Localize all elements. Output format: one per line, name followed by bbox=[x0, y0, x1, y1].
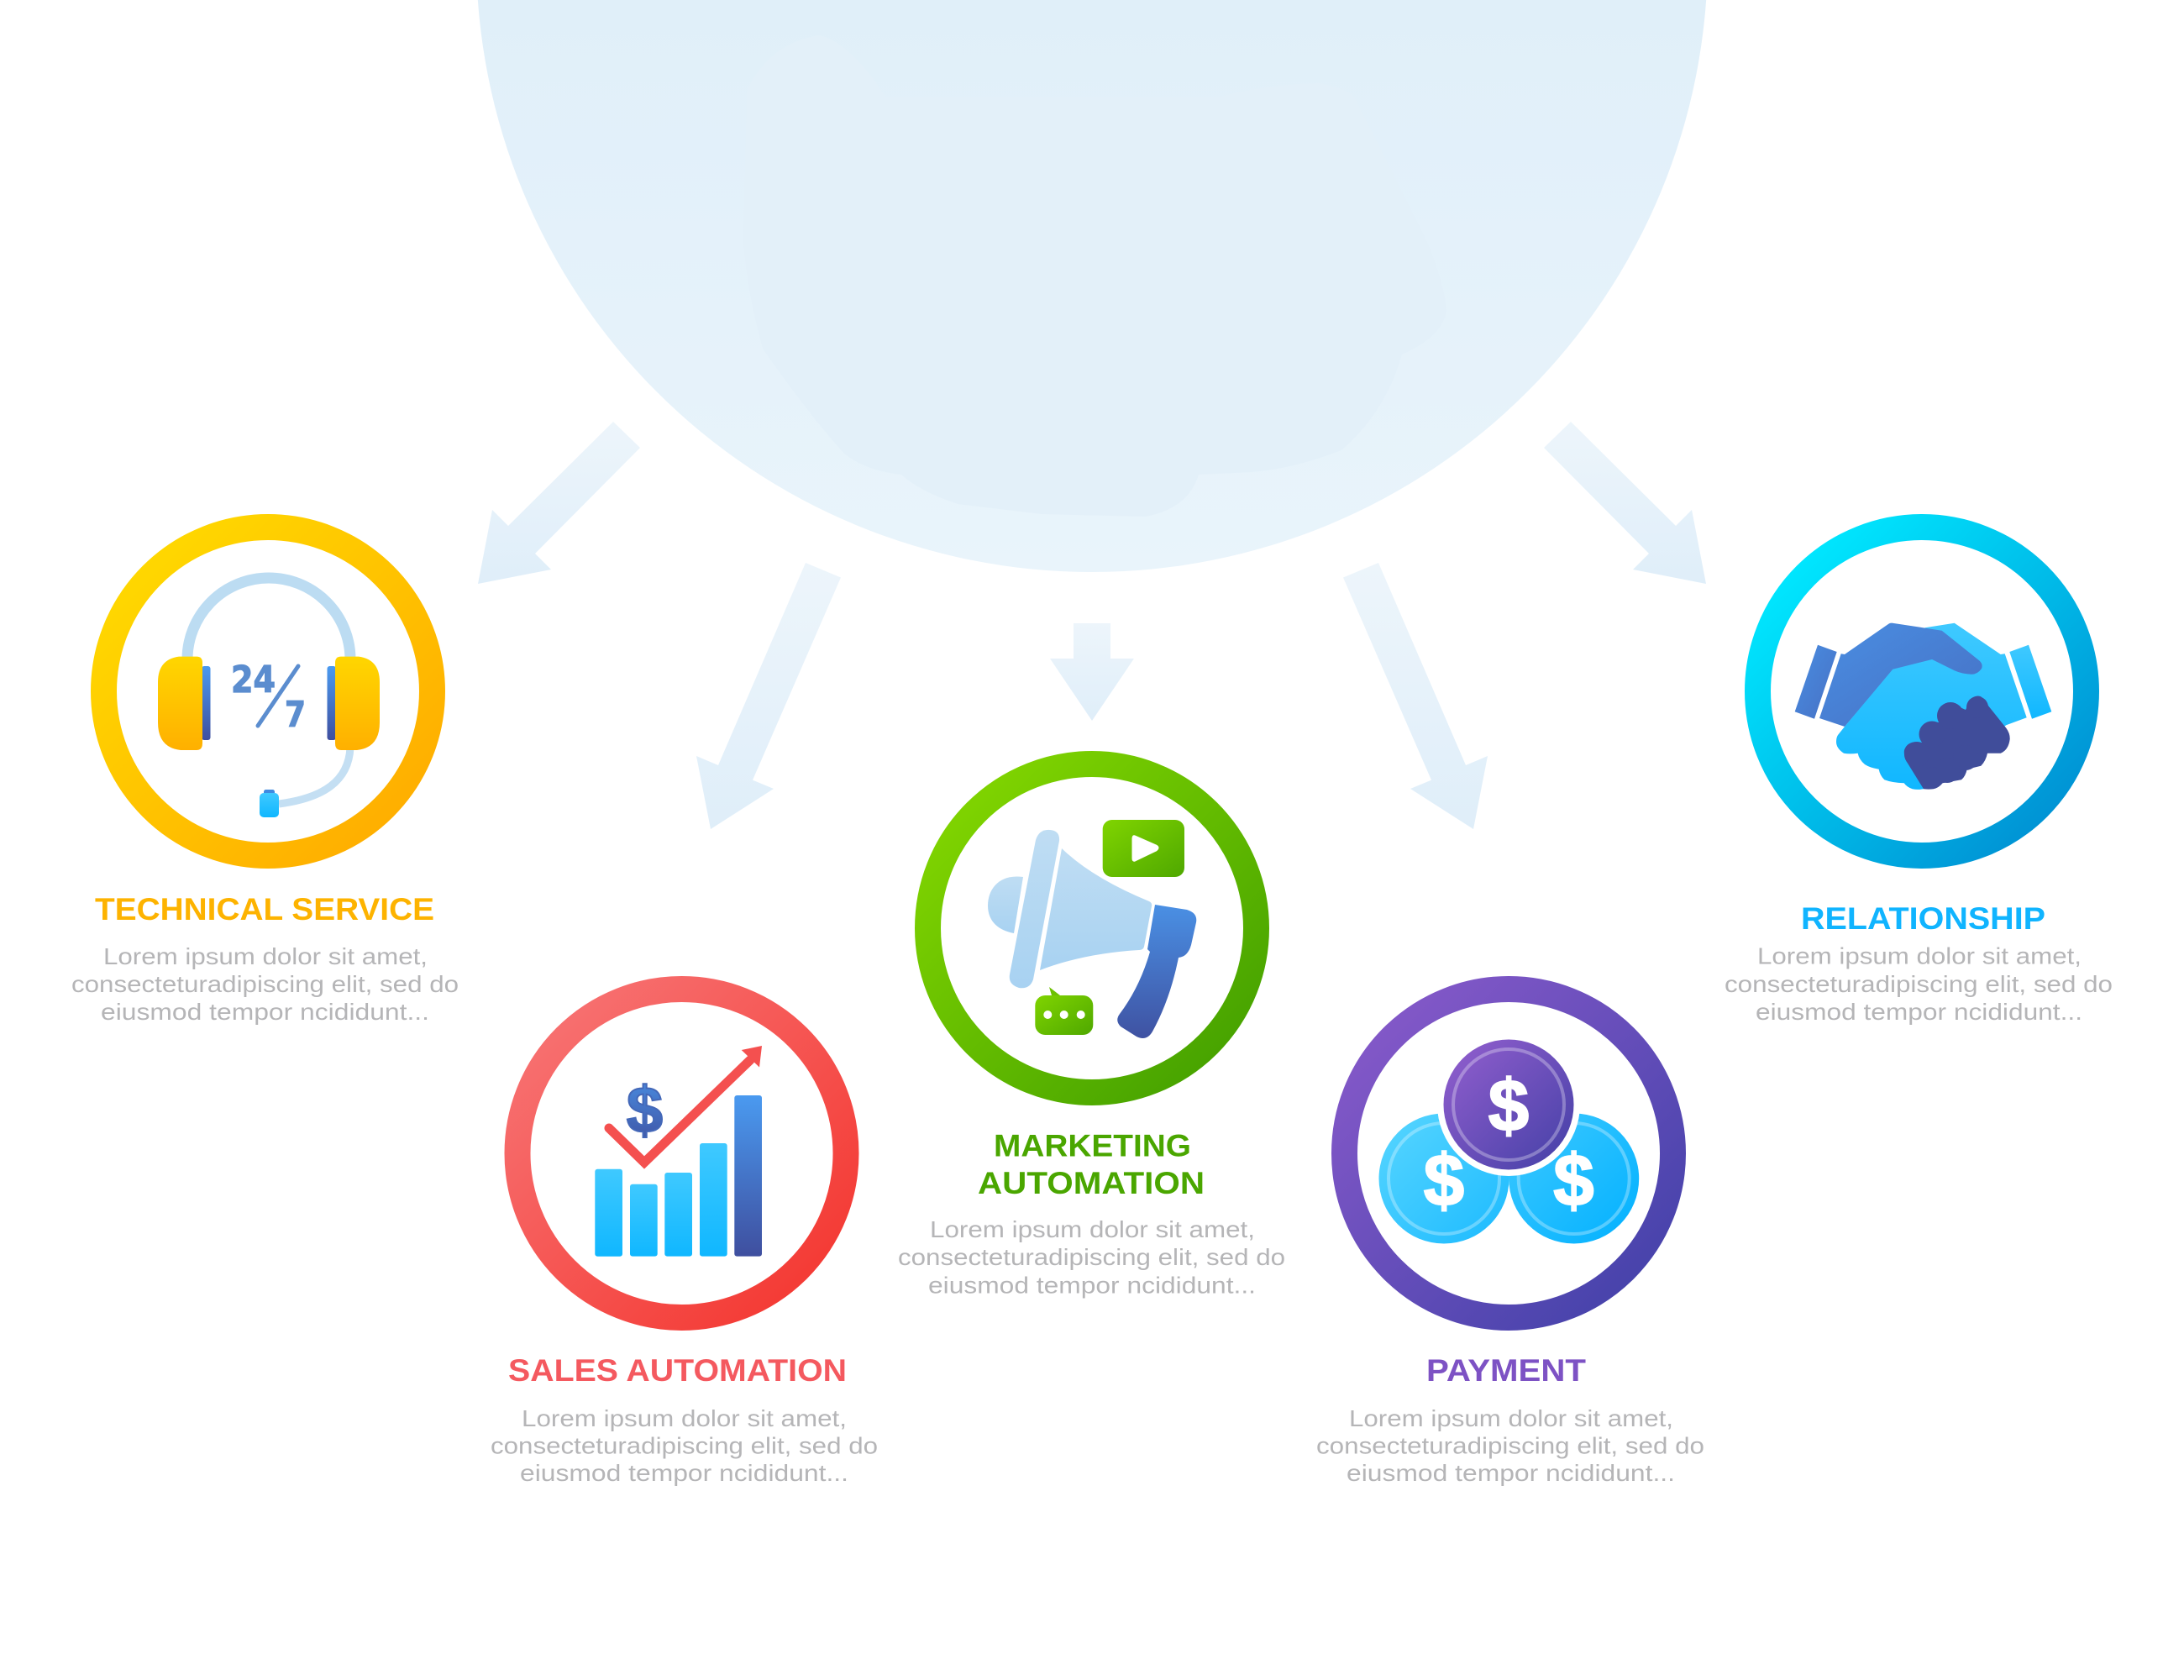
ring: technical service bbox=[104, 528, 432, 855]
text block: payment: Lorem ipsum dolor sit amet, bbox=[1349, 1405, 1673, 1431]
icon: megaphone bbox=[988, 820, 1196, 1038]
ring: relationship bbox=[1757, 528, 2087, 855]
text block: relationship: Lorem ipsum dolor sit amet, bbox=[1757, 942, 2082, 969]
text block: technical service: consecteturadipiscing elit, sed do bbox=[71, 971, 459, 997]
text block: technical service bbox=[71, 943, 459, 1025]
text block: relationship bbox=[1725, 942, 2113, 1025]
central globe bbox=[476, 0, 1708, 572]
icon: bar chart with rising arrow: $ bbox=[627, 1073, 663, 1147]
icon: coins: $ bbox=[1553, 1140, 1594, 1221]
ring: marketing automation bbox=[927, 764, 1257, 1092]
panel: sales automation bbox=[491, 990, 878, 1486]
heading: sales automation: SALES AUTOMATION bbox=[508, 1353, 847, 1388]
text block: marketing automation: Lorem ipsum dolor sit amet, bbox=[930, 1216, 1255, 1242]
ring: payment bbox=[1344, 990, 1673, 1317]
ring: sales automation bbox=[517, 990, 846, 1317]
panel: relationship bbox=[1725, 528, 2113, 1025]
heading: relationship: RELATIONSHIP bbox=[1801, 901, 2045, 936]
panel: marketing automation bbox=[898, 764, 1285, 1299]
icon: bar chart with rising arrow bbox=[595, 1046, 762, 1257]
text block: sales automation bbox=[491, 1405, 878, 1486]
heading: technical service: TECHNICAL SERVICE bbox=[95, 892, 434, 927]
text block: marketing automation bbox=[898, 1216, 1285, 1299]
icon: handshake bbox=[1795, 623, 2051, 790]
text block: relationship: eiusmod tempor ncididunt... bbox=[1756, 999, 2082, 1025]
icon: coins: $ bbox=[1488, 1065, 1529, 1147]
text block: technical service: eiusmod tempor ncididunt... bbox=[101, 999, 429, 1025]
arrow: to payment bbox=[1343, 563, 1488, 829]
text block: payment: consecteturadipiscing elit, sed do bbox=[1316, 1433, 1704, 1458]
icon: headset 24/7 bbox=[158, 578, 380, 817]
text block: marketing automation: eiusmod tempor ncididunt... bbox=[928, 1272, 1256, 1299]
text block: payment: eiusmod tempor ncididunt... bbox=[1347, 1460, 1675, 1486]
icon: coins: $ bbox=[1424, 1140, 1464, 1221]
heading: payment: PAYMENT bbox=[1426, 1353, 1586, 1388]
arrow: to sales automation bbox=[696, 563, 841, 829]
text block: sales automation: consecteturadipiscing elit, sed do bbox=[491, 1433, 878, 1458]
heading: marketing automation bbox=[978, 1129, 1205, 1200]
panel: payment bbox=[1316, 990, 1704, 1486]
icon: headset 24/7: 7 bbox=[285, 694, 306, 735]
text block: payment bbox=[1316, 1405, 1704, 1486]
text block: technical service: Lorem ipsum dolor sit amet, bbox=[103, 943, 428, 969]
arrow: to marketing automation bbox=[1050, 623, 1134, 721]
arrow: to relationship bbox=[1544, 422, 1706, 584]
text block: relationship: consecteturadipiscing elit, sed do bbox=[1725, 971, 2113, 997]
heading: marketing automation: MARKETING bbox=[994, 1129, 1191, 1163]
heading: marketing automation: AUTOMATION bbox=[978, 1166, 1205, 1200]
faint continent silhouette bbox=[743, 35, 1446, 517]
icon: coins bbox=[1379, 1033, 1639, 1243]
text block: sales automation: eiusmod tempor ncididunt... bbox=[520, 1460, 848, 1486]
text block: sales automation: Lorem ipsum dolor sit amet, bbox=[522, 1405, 847, 1431]
icon: headset 24/7: 24 bbox=[231, 659, 276, 701]
text block: marketing automation: consecteturadipiscing elit, sed do bbox=[898, 1244, 1285, 1270]
arrow: to technical service bbox=[478, 422, 640, 584]
panel: technical service bbox=[71, 528, 459, 1025]
